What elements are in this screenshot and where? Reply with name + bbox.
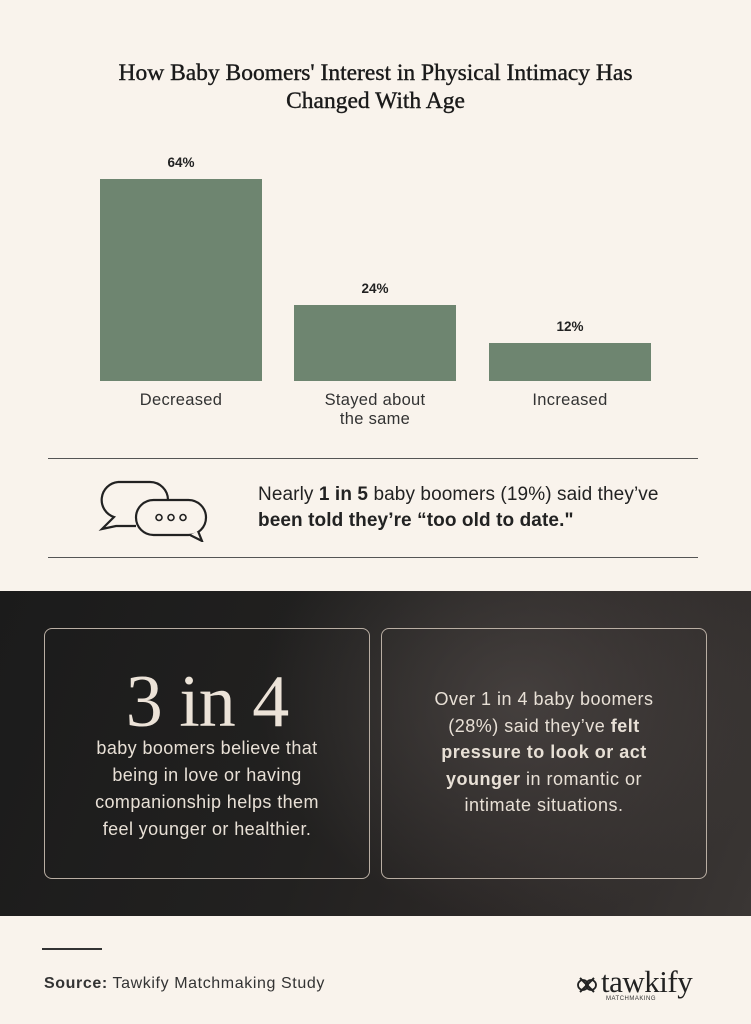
dark section	[0, 591, 751, 916]
bar: stayed: the same	[340, 410, 410, 428]
bar: increased	[489, 319, 651, 409]
callout text	[258, 484, 659, 531]
panel text: Over 1 in 4 baby boomers	[434, 689, 654, 709]
bar: stayed	[294, 281, 456, 428]
stat text: being in love or having	[112, 765, 302, 785]
big stat: 3 in 4	[126, 661, 288, 743]
bar chart	[100, 155, 651, 428]
panel text	[434, 689, 654, 815]
callout text: been told they’re “too old to date."	[258, 510, 574, 531]
bar: increased: 12%	[556, 319, 584, 334]
bar: decreased: Decreased	[140, 391, 222, 409]
panel: pressure	[381, 628, 707, 879]
title	[119, 60, 632, 114]
stat text: companionship helps them	[95, 792, 319, 812]
logo: tawkify	[601, 964, 692, 999]
icon: chat bubbles	[98, 480, 208, 542]
title: How Baby Boomers' Interest in Physical Intimacy Has	[119, 60, 632, 86]
panel: 3 in 4	[44, 628, 370, 879]
bar: stayed: 24%	[361, 281, 389, 296]
stat text	[95, 738, 319, 839]
panel text: intimate situations.	[464, 795, 624, 815]
stat text: baby boomers believe that	[96, 738, 318, 758]
panel text: younger in romantic or	[446, 768, 642, 788]
panel text: (28%) said they’ve felt	[448, 716, 640, 736]
bar: increased: Increased	[532, 391, 608, 409]
stat text: feel younger or healthier.	[103, 819, 311, 839]
source: Source: Tawkify Matchmaking Study	[44, 975, 325, 992]
bar: stayed: Stayed about	[325, 391, 425, 409]
callout text: Nearly 1 in 5 baby boomers (19%) said they’ve	[258, 484, 659, 505]
bar: decreased	[100, 155, 262, 409]
logo: MATCHMAKING	[606, 996, 656, 1002]
title: Changed With Age	[286, 88, 465, 114]
icon: logo knot	[577, 977, 597, 993]
panel text: pressure to look or act	[441, 742, 647, 762]
bar: decreased: 64%	[167, 155, 195, 170]
